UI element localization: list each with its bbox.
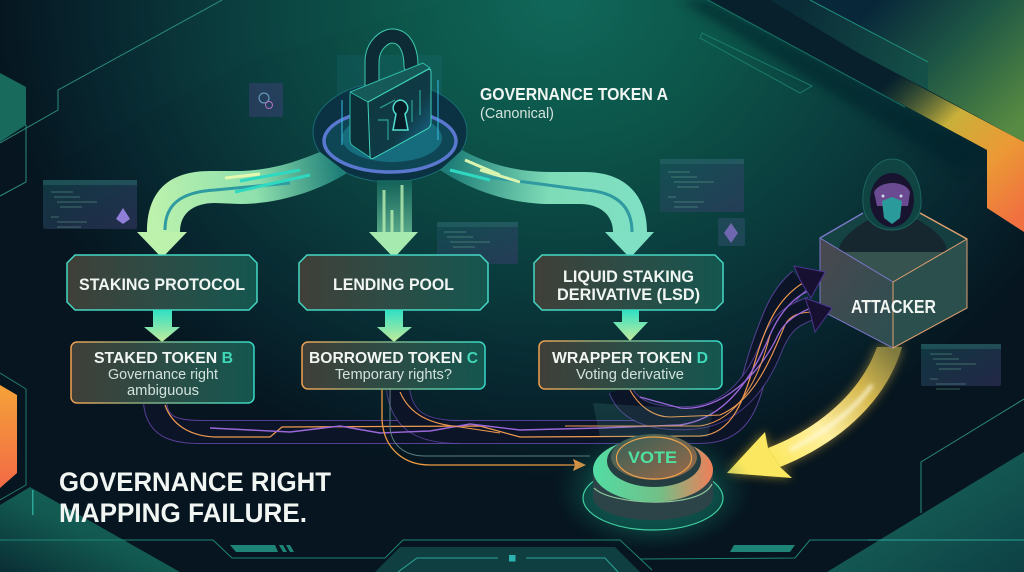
title: GOVERNANCE RIGHT xyxy=(59,467,331,497)
box: lending pool xyxy=(299,255,488,310)
big arrow: to staking protocol xyxy=(137,152,347,258)
title xyxy=(59,467,331,528)
box: staking protocol xyxy=(67,255,257,310)
arrow: lsd to wrapper token xyxy=(613,310,648,341)
box: borrowed token c xyxy=(302,342,485,389)
padlock keyhole xyxy=(393,100,408,130)
code panel: lower right xyxy=(921,344,1001,389)
box: wrapper token d: Voting derivative xyxy=(576,367,684,383)
big arrow: to lending pool xyxy=(369,180,418,258)
token label: governance token a: (Canonical) xyxy=(480,105,554,122)
box: liquid staking derivative: DERIVATIVE (LSD) xyxy=(557,286,700,304)
wire arrowheads into attacker xyxy=(794,266,832,332)
hacker xyxy=(838,159,947,252)
box: lending pool: LENDING POOL xyxy=(333,276,454,294)
code panel: lending xyxy=(437,222,518,267)
box: staked token b: ambiguous xyxy=(127,383,199,399)
arrow: staking to staked token xyxy=(144,310,180,342)
lock platform xyxy=(313,55,467,182)
purple wire bundle to attacker xyxy=(155,280,818,437)
padlock body xyxy=(350,92,371,158)
attacker yellow arrow xyxy=(727,347,902,478)
icon: padlock xyxy=(350,36,431,159)
icon: key tile xyxy=(249,83,283,117)
vote button: VOTE xyxy=(628,449,677,467)
title: MAPPING FAILURE. xyxy=(59,498,307,528)
box: staked token b: Governance right xyxy=(108,367,218,383)
token label: governance token a: GOVERNANCE TOKEN A xyxy=(480,84,668,104)
padlock shackle xyxy=(372,36,411,88)
big arrow: to liquid staking derivative xyxy=(440,150,654,258)
box: liquid staking derivative xyxy=(534,255,723,310)
box: staked token b: STAKED TOKEN B xyxy=(94,350,233,367)
box: wrapper token d xyxy=(539,341,722,389)
box: staking protocol: STAKING PROTOCOL xyxy=(79,276,245,294)
arrow: lending to borrowed token xyxy=(377,310,412,342)
attacker figure and cube xyxy=(820,159,967,348)
cube right face xyxy=(893,239,967,348)
box: borrowed token c: BORROWED TOKEN C xyxy=(309,350,478,367)
orange and grey vote lines xyxy=(382,389,590,471)
cube back faces xyxy=(820,213,967,282)
code panel: upper right xyxy=(660,159,744,212)
box: liquid staking derivative: LIQUID STAKING xyxy=(563,268,694,286)
token label: governance token a xyxy=(480,84,668,122)
vote button xyxy=(553,403,753,552)
box: wrapper token d: WRAPPER TOKEN D xyxy=(552,350,708,367)
attacker figure and cube: ATTACKER xyxy=(851,297,936,317)
icon: ethereum tile xyxy=(718,218,745,246)
box: staked token b xyxy=(71,342,254,403)
cube left face xyxy=(820,238,893,348)
code panel: top left xyxy=(43,180,137,229)
box: borrowed token c: Temporary rights? xyxy=(335,367,452,383)
